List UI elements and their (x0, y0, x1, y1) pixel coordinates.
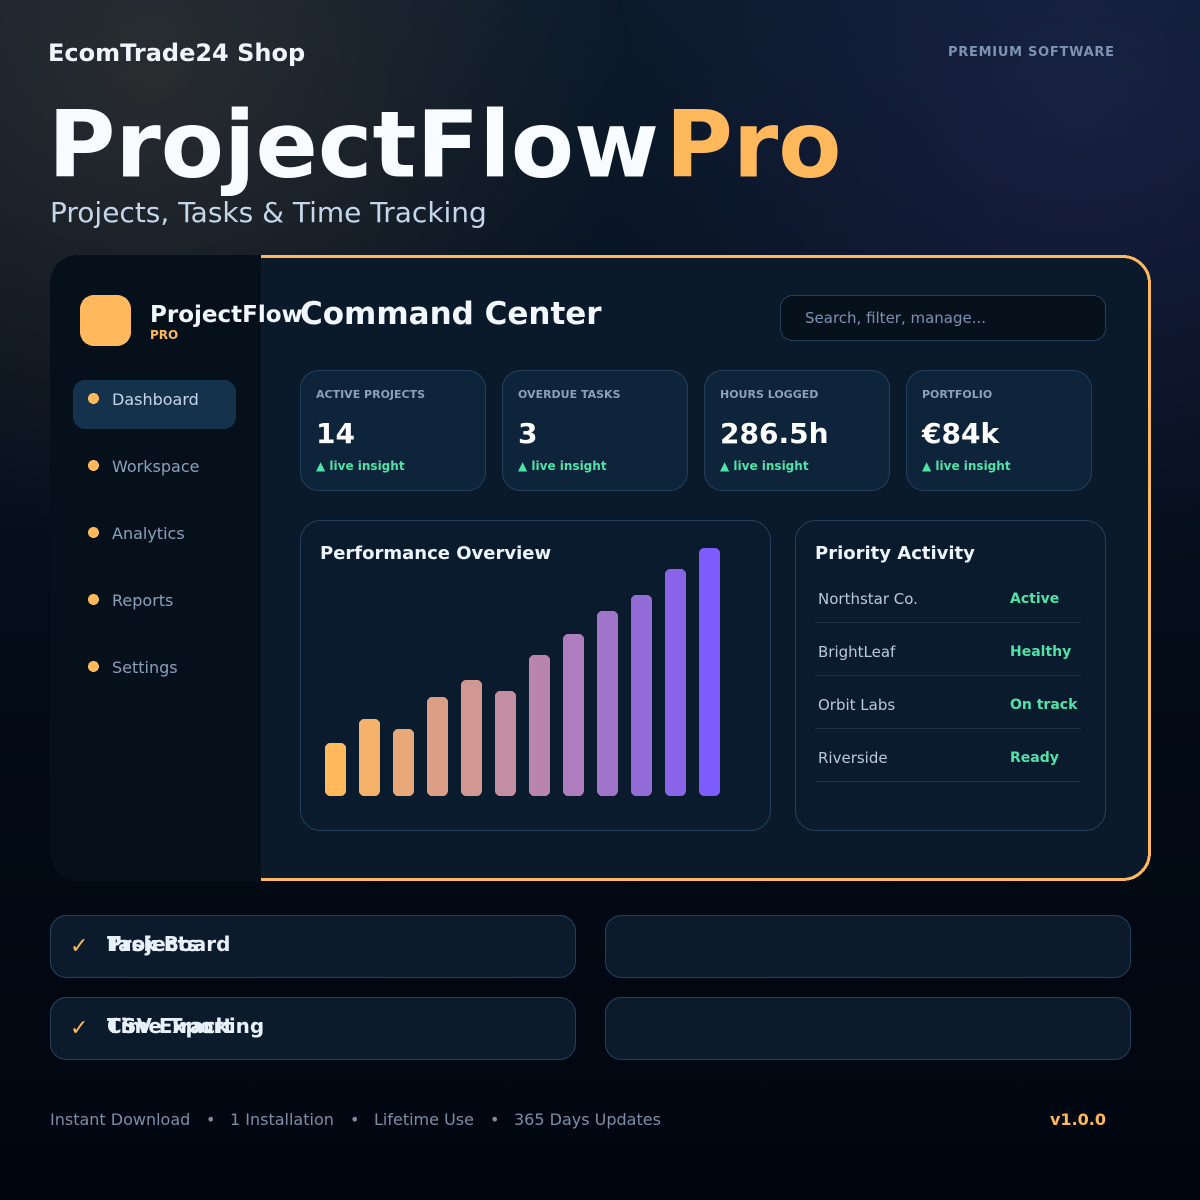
feature: time tracking and csv export (50, 998, 576, 1060)
nav: analytics: Analytics (112, 524, 185, 543)
feature: time tracking and csv export: ✓ (70, 1016, 88, 1041)
kpi: portfolio: ▲ live insight (922, 459, 1011, 473)
row: riverside (815, 749, 1081, 782)
kpi: hours logged: HOURS LOGGED (720, 388, 818, 401)
footer info: • (490, 1110, 499, 1129)
feature: projects and task board: Task Board (107, 932, 230, 956)
panel: performance overview (300, 520, 770, 830)
nav: dashboard: Dashboard (112, 390, 199, 409)
nav: workspace: Workspace (112, 457, 199, 476)
kpi: portfolio (906, 370, 1092, 490)
kpi: overdue tasks: OVERDUE TASKS (518, 388, 621, 401)
feature: time tracking and csv export: CSV Export (107, 1014, 233, 1038)
logo mark (80, 295, 131, 346)
row: northstar: Active (1010, 591, 1059, 607)
feature: empty card lower right (606, 998, 1130, 1060)
row: brightleaf (815, 643, 1081, 676)
brand name: EcomTrade24 Shop (48, 39, 305, 67)
feature: projects and task board (50, 916, 576, 978)
kpi: portfolio: PORTFOLIO (922, 388, 992, 401)
logo name: ProjectFlow (150, 302, 303, 328)
kpi: active projects: ▲ live insight (316, 459, 405, 473)
kpi: active projects (300, 370, 486, 490)
title: ProjectFlow (48, 92, 659, 198)
kpi: portfolio: €84k (921, 417, 1000, 450)
panel: priority activity (796, 520, 1106, 830)
nav active background (73, 380, 236, 429)
row: orbit labs: On track (1010, 697, 1078, 713)
nav: reports: Reports (112, 591, 173, 610)
row: riverside: Riverside (818, 749, 888, 767)
kpi: hours logged: ▲ live insight (720, 459, 809, 473)
footer info (50, 1110, 661, 1129)
footer info: 365 Days Updates (514, 1110, 661, 1129)
kpi: hours logged (704, 370, 890, 490)
search box: Search, filter, manage... (805, 309, 986, 327)
logo sub: PRO (150, 328, 178, 342)
heading: command center: Command Center (300, 296, 602, 332)
footer info: 1 Installation (230, 1110, 334, 1129)
kpi: overdue tasks: 3 (518, 417, 537, 450)
kpi: active projects: ACTIVE PROJECTS (316, 388, 425, 401)
row: orbit labs: Orbit Labs (818, 696, 895, 714)
row: brightleaf: Healthy (1010, 644, 1071, 660)
kpi: overdue tasks: ▲ live insight (518, 459, 607, 473)
feature: projects and task board: Projects (107, 932, 199, 956)
row: brightleaf: BrightLeaf (818, 643, 896, 661)
footer info: Instant Download (50, 1110, 190, 1129)
activity heading: Priority Activity (815, 543, 975, 564)
footer info: Lifetime Use (374, 1110, 474, 1129)
row: orbit labs (815, 696, 1081, 729)
search box (780, 296, 1106, 340)
bar chart (325, 548, 720, 796)
version: v1.0.0 (1050, 1110, 1106, 1129)
row: riverside: Ready (1010, 750, 1059, 766)
title: Pro (666, 92, 842, 198)
nav: settings: Settings (112, 658, 178, 677)
premium label: PREMIUM SOFTWARE (948, 45, 1115, 60)
row: northstar: Northstar Co. (818, 590, 918, 608)
sidebar (50, 255, 303, 881)
subtitle: Projects, Tasks & Time Tracking (50, 196, 487, 229)
kpi: hours logged: 286.5h (720, 417, 828, 450)
feature: projects and task board: ✓ (70, 934, 88, 959)
footer info: • (206, 1110, 215, 1129)
panel: dashboard (50, 255, 1150, 881)
feature: empty card right (606, 916, 1130, 978)
feature: time tracking and csv export: Time Tracking (107, 1014, 264, 1038)
kpi: active projects: 14 (316, 417, 355, 450)
chart heading: Performance Overview (320, 543, 551, 564)
dashboard frame (52, 256, 1150, 880)
row: northstar (815, 590, 1081, 623)
kpi: overdue tasks (502, 370, 688, 490)
footer info: • (350, 1110, 359, 1129)
